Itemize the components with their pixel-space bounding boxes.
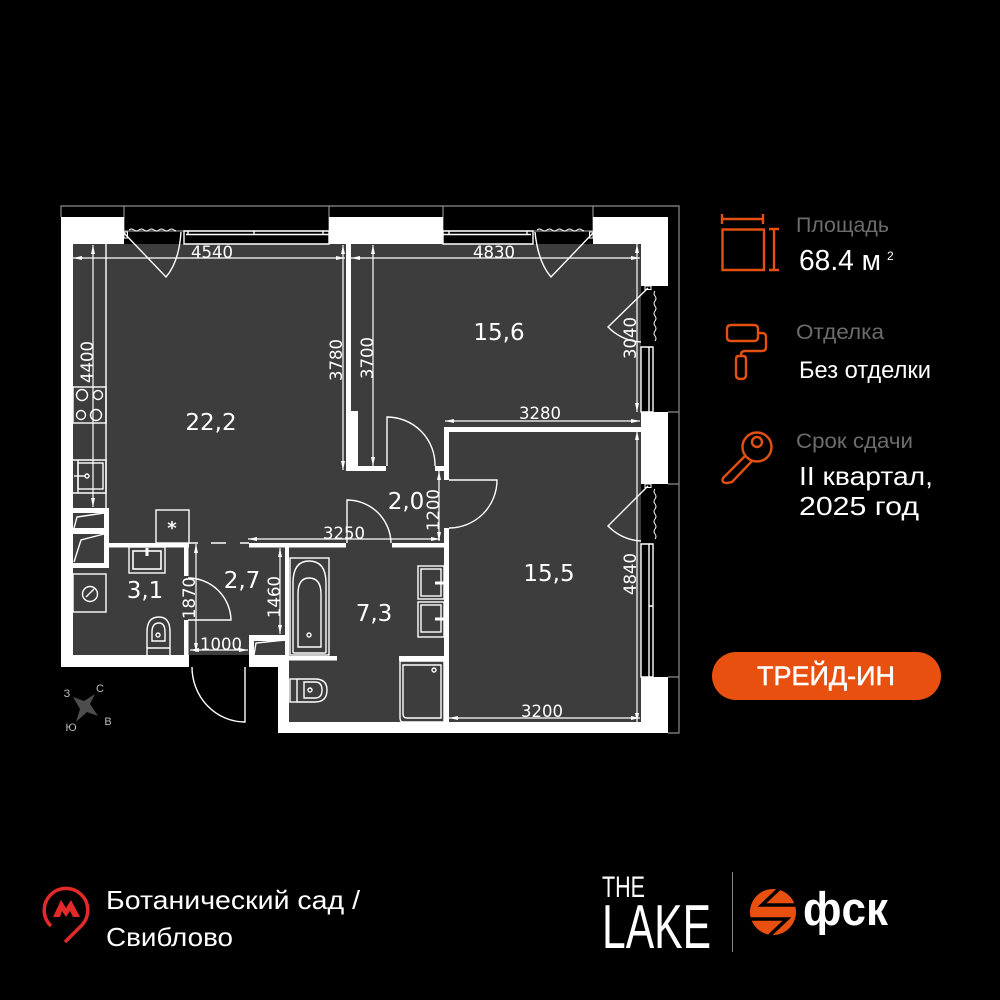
logo emblem	[749, 887, 797, 937]
main bathroom fixtures	[290, 558, 444, 722]
compass letters: Ю	[65, 722, 77, 734]
room areas: 15,6	[473, 320, 525, 346]
logo: FSK	[749, 882, 888, 937]
room areas: 7,3	[356, 601, 392, 627]
dimension labels: 1870	[180, 577, 199, 619]
delivery label: Срок сдачи	[796, 430, 913, 453]
floor area	[73, 244, 641, 722]
dimension labels: 4840	[621, 553, 640, 595]
dimension lines	[73, 244, 640, 722]
icon: metro pin	[44, 888, 88, 942]
kitchen furniture	[73, 244, 189, 543]
dimension labels: 3280	[519, 404, 561, 423]
dimension labels: 1460	[265, 576, 284, 618]
dimension labels: 3200	[521, 702, 563, 721]
compass letters	[64, 683, 112, 734]
compass letters: З	[64, 688, 71, 700]
small bathroom fixtures	[73, 547, 170, 655]
icon: paint roller	[727, 325, 766, 379]
area label: Площадь	[796, 214, 889, 237]
dimension labels: 3780	[327, 339, 346, 381]
room areas: 2,7	[224, 568, 260, 594]
icon: key	[722, 432, 772, 483]
icon: area	[722, 214, 779, 270]
room areas: 22,2	[185, 410, 237, 436]
dimension labels: 3700	[358, 337, 377, 379]
compass	[64, 683, 112, 734]
walls	[61, 217, 668, 733]
room areas: 15,5	[523, 561, 575, 587]
dimension labels	[78, 243, 640, 721]
outer contour lines	[61, 206, 679, 733]
logo: The Lake: THE	[602, 871, 645, 904]
area block	[722, 214, 894, 277]
icon: metro letter	[53, 900, 80, 917]
area value: 68.4 м	[799, 245, 881, 277]
dimension labels: 4400	[78, 341, 97, 383]
icon: ventilation star: *	[167, 518, 177, 539]
compass letters: С	[96, 683, 104, 695]
room areas: 3,1	[127, 578, 163, 604]
balcony doors	[124, 229, 656, 541]
delivery value line 2: 2025 год	[799, 491, 919, 521]
dimension labels: 4830	[473, 243, 515, 262]
metro station	[44, 885, 361, 952]
station line 2: Свиблово	[106, 922, 233, 952]
trade-in button: ТРЕЙД-ИН	[757, 660, 895, 691]
compass letters: В	[104, 716, 112, 728]
trade-in button	[712, 652, 941, 700]
logo: The Lake	[602, 871, 711, 962]
ventilation shafts	[254, 641, 285, 655]
finish block	[727, 321, 931, 384]
delivery block	[722, 430, 933, 521]
interior doors	[188, 417, 497, 722]
dimension labels: 3250	[323, 524, 365, 543]
windows	[184, 231, 653, 677]
delivery value line 1: II квартал,	[799, 461, 933, 491]
room areas	[127, 320, 575, 627]
dimension labels: 1200	[424, 489, 443, 531]
finish value: Без отделки	[799, 357, 931, 384]
finish label: Отделка	[796, 321, 884, 344]
floor plan	[61, 206, 679, 733]
logo: The Lake: LAKE	[602, 893, 711, 962]
room areas: 2,0	[388, 489, 424, 515]
area superscript: 2	[887, 249, 894, 263]
shaft details	[74, 513, 285, 655]
dimension labels: 1000	[200, 635, 242, 654]
logo divider	[732, 872, 733, 952]
compass star	[73, 694, 98, 722]
dimension labels: 4540	[191, 243, 233, 262]
dimension labels: 3040	[621, 317, 640, 359]
logo wordmark: фск	[803, 882, 888, 935]
station line 1: Ботанический сад /	[106, 885, 361, 915]
